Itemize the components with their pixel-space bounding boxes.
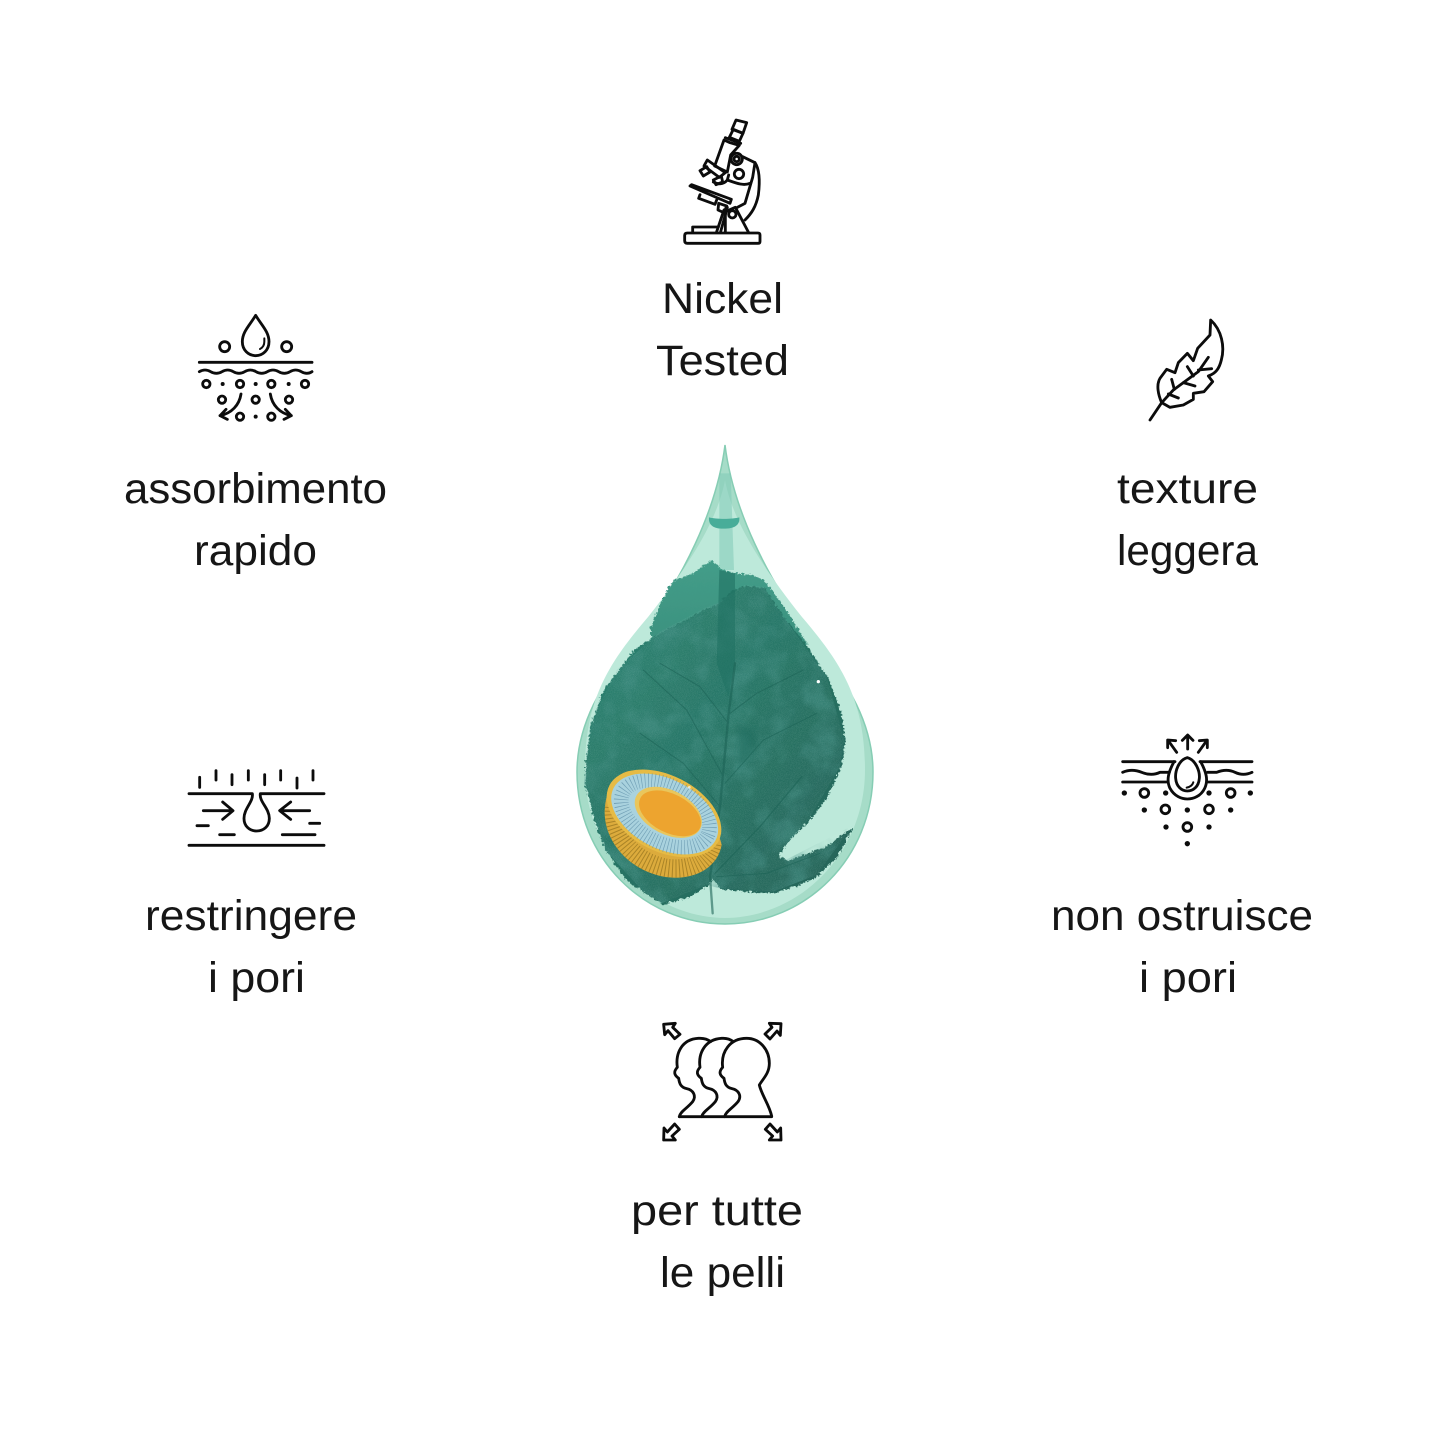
liposome	[604, 770, 722, 878]
label: non ostruisce i pori: non ostruisce	[1051, 892, 1313, 940]
leaf upper part	[650, 559, 807, 697]
stem band	[717, 570, 735, 697]
liposome body	[605, 771, 722, 878]
label: assorbimento rapido: rapido	[194, 527, 317, 575]
label: restringere i pori	[145, 892, 357, 1002]
label: non ostruisce i pori: i pori	[1139, 954, 1237, 1002]
drop inner lighter body	[585, 480, 865, 918]
label: non ostruisce i pori	[1051, 892, 1313, 1002]
orange core rim	[626, 776, 710, 848]
icon: rapid absorption	[199, 315, 312, 420]
label: per tutte le pelli	[631, 1187, 803, 1297]
leaf main blade	[584, 585, 853, 903]
central drop with leaf and liposome	[577, 445, 873, 924]
label: per tutte le pelli: le pelli	[660, 1249, 785, 1297]
leaf	[584, 559, 853, 903]
label: texture leggera	[1117, 465, 1258, 575]
heading: Nickel Tested	[656, 275, 789, 385]
label: assorbimento rapido	[124, 465, 387, 575]
blue lipid ring	[598, 757, 731, 871]
label: assorbimento rapido: assorbimento	[124, 465, 387, 513]
infographic canvas	[126, 118, 1312, 1296]
label: restringere i pori: i pori	[208, 954, 305, 1002]
upper stem in drop	[719, 473, 734, 570]
liposome lattice	[605, 807, 722, 878]
white sparkles	[688, 680, 820, 789]
leaf veins	[640, 663, 820, 913]
label: texture leggera: texture	[1117, 465, 1258, 513]
label: per tutte le pelli: per tutte	[631, 1187, 803, 1235]
label: restringere i pori: restringere	[145, 892, 357, 940]
heading: Nickel Tested: Tested	[656, 337, 789, 385]
small capsule near tip	[709, 517, 739, 529]
liposome rim	[592, 752, 736, 875]
drop body	[577, 445, 873, 924]
radial lipid lines	[610, 767, 721, 861]
leaf blotches	[584, 585, 853, 903]
icon: all skin types	[664, 1023, 781, 1140]
icon: non comedogenic	[1122, 735, 1253, 846]
leaf texture	[584, 585, 853, 903]
label: texture leggera: leggera	[1117, 527, 1258, 575]
heading: Nickel Tested: Nickel	[662, 275, 783, 323]
icon: microscope	[685, 120, 760, 243]
orange core	[632, 781, 708, 846]
icon: light leaf	[1150, 320, 1223, 420]
icon: tighten pores	[189, 771, 324, 845]
dark shadow patch	[737, 723, 757, 767]
